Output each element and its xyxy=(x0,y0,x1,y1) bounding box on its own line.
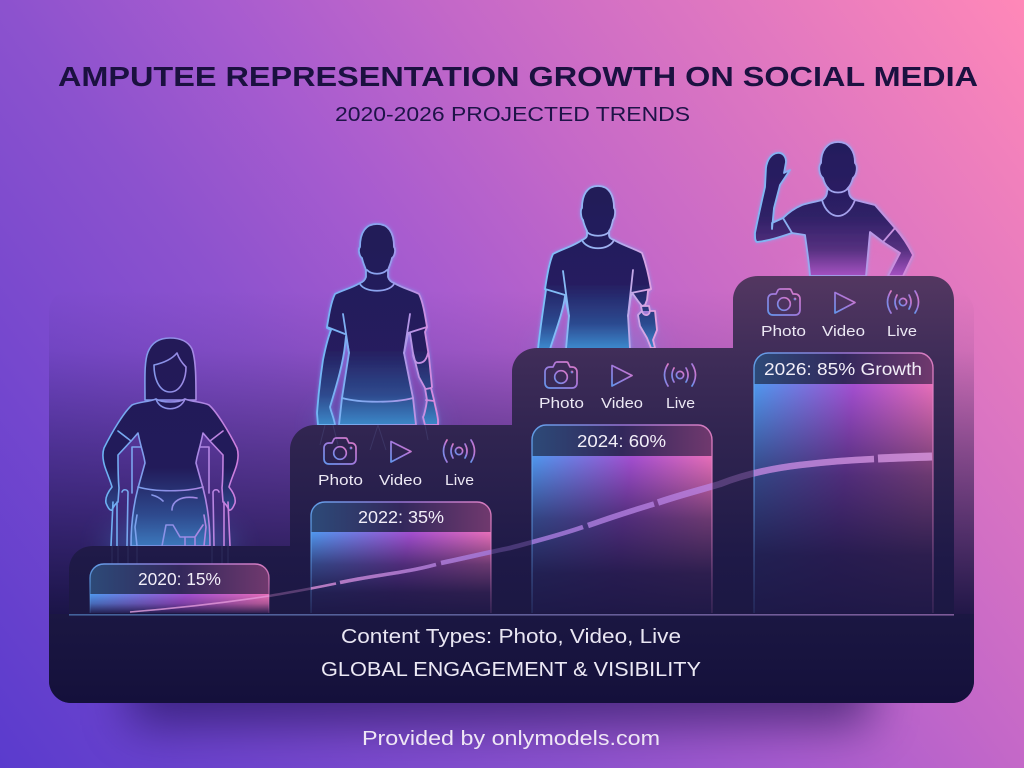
icon labels 2024: Video xyxy=(601,395,643,412)
card outline xyxy=(90,564,269,613)
bar card: 2026 xyxy=(754,353,933,613)
card label: 2022: 35% xyxy=(358,507,444,527)
card fill xyxy=(311,532,491,613)
figure: person 2022 with forearm prosthesis xyxy=(317,224,438,425)
icon: live broadcast xyxy=(888,291,918,313)
card outline xyxy=(311,502,491,613)
card header xyxy=(90,564,269,594)
faint figure reflections on panel xyxy=(112,425,428,565)
icon: play xyxy=(391,442,411,462)
trend line bright layer inside bars xyxy=(130,456,932,612)
garment and socket details xyxy=(327,270,434,402)
backing plate xyxy=(49,290,974,703)
icon labels 2026 xyxy=(761,323,917,340)
icon: camera xyxy=(768,289,800,315)
bar card: 2022 xyxy=(311,502,491,613)
card outline xyxy=(532,425,712,613)
trend line faint layer xyxy=(130,456,932,612)
stepped dark panel xyxy=(69,276,954,614)
title: AMPUTEE REPRESENTATION GROWTH ON SOCIAL MEDIA xyxy=(58,61,978,92)
wheelchair frame xyxy=(111,447,230,546)
card label: 2026: 85% Growth xyxy=(764,359,922,379)
prosthetic hand xyxy=(638,306,657,348)
card header xyxy=(311,502,491,532)
figure glows xyxy=(104,263,901,571)
icon labels 2024 xyxy=(539,395,695,412)
icon: live broadcast xyxy=(444,440,474,462)
card fill xyxy=(90,594,269,613)
lower dark band xyxy=(49,614,974,703)
icons row 2024 xyxy=(545,362,696,388)
card outline xyxy=(754,353,933,613)
torso and arms xyxy=(103,399,238,546)
baseline axis xyxy=(69,614,954,616)
head and body silhouette xyxy=(538,186,651,349)
bar card: 2024 xyxy=(532,425,712,613)
icon labels 2024: Photo xyxy=(539,395,584,412)
icon: play xyxy=(612,366,632,386)
content types caption: Content Types: Photo, Video, Live xyxy=(341,626,681,648)
icon labels 2022 xyxy=(318,472,474,489)
icons row 2022 xyxy=(324,438,474,464)
card label: 2024: 60% xyxy=(577,431,666,451)
garment details xyxy=(545,232,651,316)
drop shadow under the plate xyxy=(130,640,870,725)
icon labels 2026: Live xyxy=(887,323,917,340)
icon: live broadcast xyxy=(664,364,696,386)
growth trend line xyxy=(130,456,932,612)
attribution: Provided by onlymodels.com xyxy=(362,728,660,750)
icon: camera xyxy=(545,362,577,388)
head and body silhouette xyxy=(317,224,438,425)
icon labels 2022: Video xyxy=(379,472,422,489)
bar card: 2020 xyxy=(90,564,269,613)
subtitle: 2020-2026 PROJECTED TRENDS xyxy=(335,103,690,126)
icon labels 2022: Live xyxy=(445,472,474,489)
garment details xyxy=(783,188,895,242)
card header xyxy=(754,353,933,384)
icon labels 2024: Live xyxy=(666,395,695,412)
card label: 2020: 15% xyxy=(138,569,221,589)
icon labels 2026: Photo xyxy=(761,323,806,340)
figure: person 2026 waving xyxy=(755,142,913,276)
icon labels 2026: Video xyxy=(822,323,865,340)
figure: person 2024 with below-elbow prosthesis xyxy=(538,186,657,349)
hair xyxy=(145,338,196,400)
garment and leg details xyxy=(118,399,223,510)
icon: camera xyxy=(324,438,356,464)
icons row 2026 xyxy=(768,289,918,315)
icon labels 2022: Photo xyxy=(318,472,363,489)
card fill xyxy=(532,456,712,613)
card header xyxy=(532,425,712,456)
card fill xyxy=(754,384,933,613)
engagement caption: GLOBAL ENGAGEMENT & VISIBILITY xyxy=(321,659,701,681)
face xyxy=(154,353,186,392)
icon: play xyxy=(835,292,855,313)
head and body silhouette xyxy=(755,142,913,276)
figure: woman in wheelchair 2020 xyxy=(103,338,238,546)
